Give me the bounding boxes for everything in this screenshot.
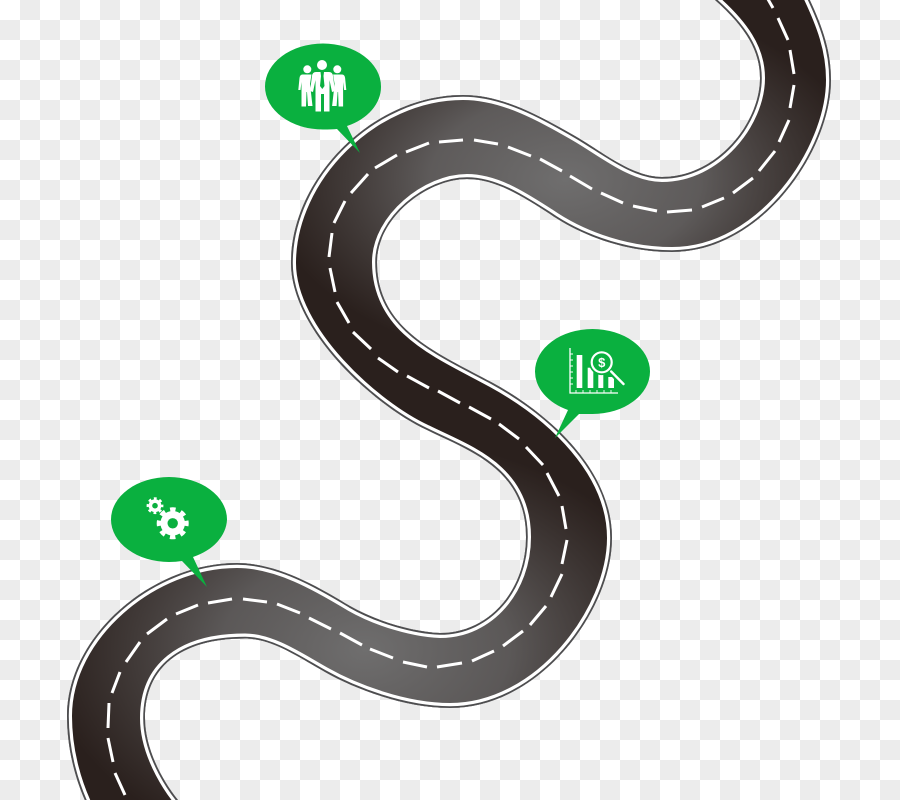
icon: two gears	[148, 498, 186, 537]
icon: three business people	[298, 60, 346, 112]
callout: team	[265, 44, 381, 153]
callout: financial analysis	[535, 329, 650, 438]
speech bubble	[111, 477, 227, 587]
icon: bar chart with magnifier and dollar sign: $	[598, 355, 606, 370]
speech bubble	[265, 44, 381, 153]
dashed centre line	[108, 0, 794, 795]
callout: process settings	[111, 477, 227, 587]
speech bubble	[535, 329, 650, 438]
